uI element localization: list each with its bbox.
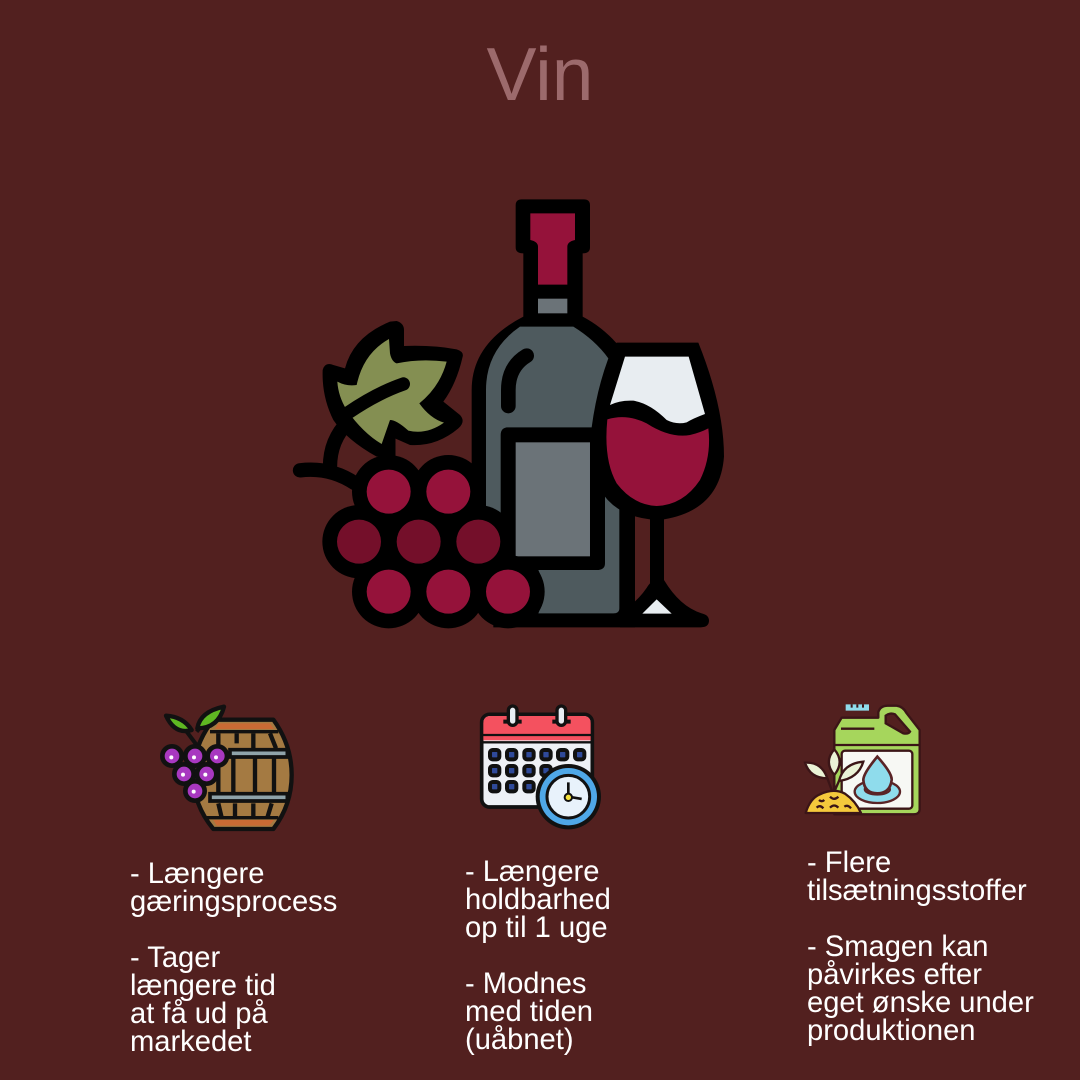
icon: wine bottle, glass and grapes [300, 199, 724, 628]
text: column 3: - Smagen kan [807, 931, 988, 963]
water drop [863, 757, 892, 793]
icon: barrel with grapes [162, 707, 292, 829]
glass silhouette [590, 343, 724, 627]
text: column 1: gæringsprocess [130, 886, 337, 918]
wine [606, 417, 709, 506]
text: column 1: at få ud på [130, 998, 268, 1030]
text: column 1: - Tager [130, 942, 220, 974]
text: column 3: eget ønske under [807, 987, 1034, 1019]
grape highlights [169, 755, 218, 794]
bottle highlight [508, 356, 527, 406]
leaf [337, 339, 447, 444]
calendar header [483, 716, 591, 735]
text: column 3: tilsætningsstoffer [807, 875, 1027, 907]
text: column 3: produktionen [807, 1015, 976, 1047]
canister details [834, 729, 919, 745]
barrel rims [213, 723, 274, 826]
staves [218, 733, 276, 818]
soil [806, 791, 861, 813]
leaf outline [323, 321, 463, 457]
text: column 2: - Længere [465, 856, 599, 888]
bottle silhouette [472, 199, 635, 627]
text: column 1: - Længere [130, 858, 264, 890]
gap between bottle and stem [635, 518, 650, 601]
canister [834, 706, 920, 814]
text: column 2: holdbarhed [465, 884, 611, 916]
leaf vein [348, 384, 403, 413]
binder rings [503, 716, 571, 728]
calendar body [482, 714, 592, 807]
text: column 2: (uåbnet) [465, 1024, 574, 1056]
glass upper [610, 357, 705, 423]
ripple [855, 780, 900, 803]
label [842, 751, 912, 809]
text: column 2 [465, 856, 611, 1056]
bottle label [516, 442, 590, 556]
handle hole [886, 714, 910, 734]
glass base [642, 599, 672, 614]
grape stems [182, 720, 207, 745]
text: column 3: - Flere [807, 847, 891, 879]
grapes [162, 746, 227, 801]
clock [536, 764, 601, 829]
date cells [490, 750, 584, 791]
grape cluster [322, 455, 545, 628]
title: Vin [486, 32, 594, 116]
icon: canister with additives [805, 704, 920, 814]
text: column 2: op til 1 uge [465, 912, 608, 944]
cork [530, 213, 575, 285]
bottle body [486, 327, 619, 613]
stems [300, 422, 388, 483]
text: column 1: markedet [130, 1026, 251, 1058]
text: column 2: - Modnes [465, 968, 586, 1000]
text: column 2: med tiden [465, 996, 593, 1028]
cap [846, 704, 869, 711]
text: column 3 [807, 847, 1034, 1047]
icon: calendar with clock [482, 706, 601, 829]
barrel hoops [210, 750, 287, 801]
barrel [193, 720, 292, 829]
leaves [166, 707, 224, 731]
clock hands [568, 782, 582, 799]
text: column 1: længere tid [130, 970, 276, 1002]
header stripe [483, 736, 591, 740]
neck band [538, 299, 567, 313]
text: column 1 [130, 858, 337, 1058]
plant [805, 749, 863, 781]
text: column 3: påvirkes efter [807, 959, 982, 991]
